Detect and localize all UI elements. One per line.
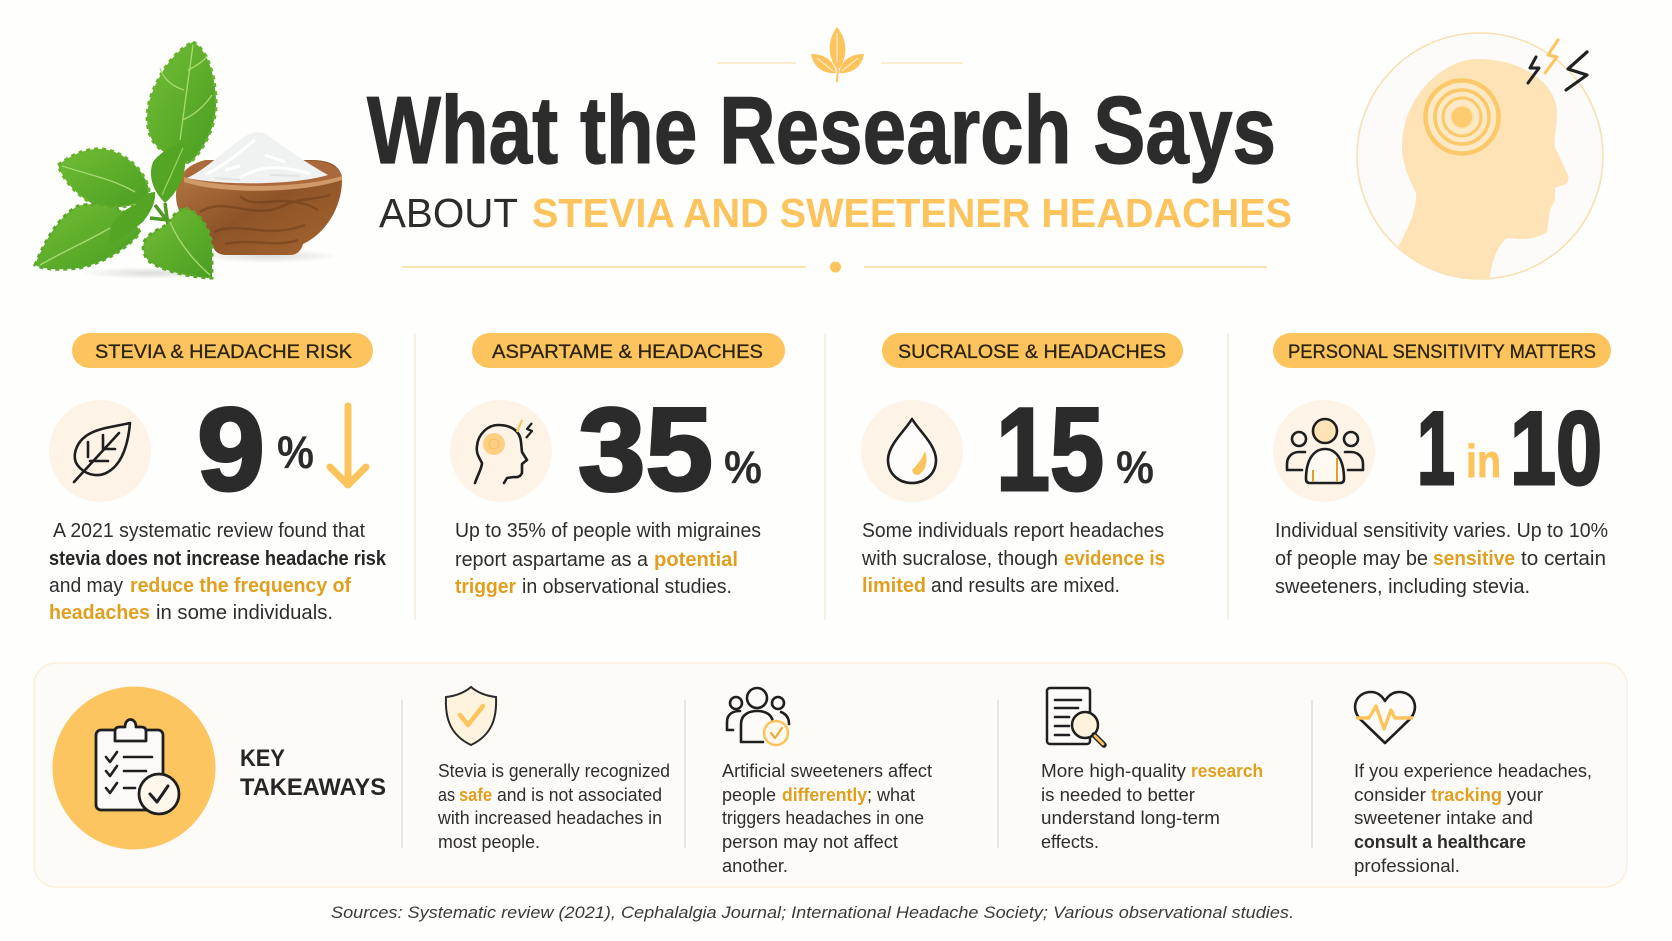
- icon: head with headache: [1357, 33, 1603, 279]
- stat: 1 in 10: 1: [1417, 391, 1455, 507]
- takeaway: tracking: [1354, 692, 1592, 876]
- takeaway: research: [1041, 688, 1263, 852]
- text: sensitivity finding: to certain: [1521, 548, 1606, 570]
- stat: 9 percent: 9: [197, 384, 265, 516]
- text: sensitivity finding: of people may be: [1275, 548, 1428, 570]
- text: aspartame finding: report aspartame as a: [455, 549, 649, 571]
- text: Stevia is generally recognized: [438, 761, 670, 781]
- text: professional.: [1354, 856, 1460, 876]
- text: stevia finding: headaches: [49, 602, 150, 624]
- text: sensitivity finding: [1275, 520, 1608, 598]
- text: research: [1191, 761, 1263, 781]
- text: most people.: [438, 832, 540, 852]
- text: Artificial sweeteners affect: [722, 761, 932, 781]
- text: aspartame finding: Up to 35% of people with migraines: [455, 520, 761, 542]
- photo: stevia leaves and bowl of powder: [35, 42, 342, 279]
- stat: 35 percent: %: [724, 441, 762, 493]
- text: as: [438, 785, 455, 805]
- text: stevia finding: in some individuals.: [156, 602, 333, 624]
- text: ; what: [867, 785, 915, 805]
- text: people: [722, 785, 776, 805]
- text: effects.: [1041, 832, 1099, 852]
- text: with increased headaches in: [437, 808, 662, 828]
- stat: 15 percent: %: [1116, 441, 1154, 493]
- text: your: [1507, 785, 1543, 805]
- panel: key takeaways: [34, 663, 1627, 887]
- text: another.: [722, 856, 788, 876]
- icon: people: [1273, 400, 1375, 502]
- text: aspartame finding: potential: [654, 549, 738, 571]
- icon: head with lightning: [450, 400, 552, 502]
- panel: stevia and headache risk: [49, 333, 387, 624]
- text: safe: [459, 785, 492, 805]
- text: [1041, 761, 1263, 852]
- text: aspartame finding: trigger: [455, 576, 516, 598]
- icon: heart with pulse: [1355, 692, 1415, 743]
- arrow: down: [330, 406, 366, 485]
- heading: key takeaways: [240, 745, 386, 801]
- text: tracking: [1431, 785, 1502, 805]
- text: sweetener intake and: [1354, 808, 1533, 828]
- stat: 15 percent: 15: [996, 384, 1104, 516]
- icon: drop: [861, 400, 963, 502]
- text: stevia finding: and may: [49, 575, 123, 597]
- icon: clipboard badge: [52, 686, 216, 850]
- text: stevia finding: reduce the frequency of: [130, 575, 351, 597]
- stat: 1 in 10: 10: [1510, 391, 1602, 507]
- title underline with dot: [402, 262, 1267, 272]
- heading: key takeaways: KEY: [240, 745, 285, 772]
- text: consult a healthcare: [1354, 832, 1526, 852]
- text: consider: [1354, 785, 1426, 805]
- text: [722, 761, 932, 876]
- text: If you experience headaches,: [1354, 761, 1592, 781]
- text: [1354, 761, 1592, 876]
- panel: aspartame and headaches: [450, 333, 785, 598]
- text: stevia finding: [49, 520, 387, 624]
- text: More high-quality: [1041, 761, 1186, 781]
- text: stevia finding: A 2021 systematic review found that: [53, 520, 365, 542]
- heading pill: stevia: STEVIA & HEADACHE RISK: [95, 342, 352, 363]
- column dividers: [415, 333, 1228, 620]
- text: stevia finding: stevia does not increase headache risk: [49, 548, 387, 570]
- text: aspartame finding: in observational studies.: [522, 576, 732, 598]
- icon: document with magnifier: [1047, 688, 1104, 745]
- panel: personal sensitivity matters: [1273, 333, 1611, 598]
- text: differently: [782, 785, 867, 805]
- text: sensitivity finding: sensitive: [1433, 548, 1515, 570]
- text: aspartame finding: [455, 520, 761, 598]
- icon: leaf: [49, 400, 151, 502]
- heading pill: sucralose: SUCRALOSE & HEADACHES: [898, 342, 1166, 363]
- text: sensitivity finding: sweeteners, including stevia.: [1275, 576, 1530, 598]
- icon: shield: [446, 687, 496, 745]
- title: What the Research Says: [367, 77, 1276, 184]
- heading pill: sensitivity: [1273, 333, 1611, 368]
- text: sensitivity finding: Individual sensitivity varies. Up to 10%: [1275, 520, 1608, 542]
- icon: people with check: [727, 688, 789, 745]
- sources: Sources: Systematic review (2021), Cephalalgia Journal; International Headache Society; Various observational studies.: [331, 903, 1294, 922]
- text: understand long-term: [1041, 808, 1220, 828]
- heading pill: aspartame: [472, 333, 785, 368]
- text: sucralose finding: [861, 520, 1165, 597]
- text: and is not associated: [497, 785, 662, 805]
- takeaway: differently: [722, 688, 932, 876]
- text: [437, 761, 670, 852]
- text: sucralose finding: limited: [862, 575, 926, 597]
- heading: key takeaways: TAKEAWAYS: [240, 774, 386, 801]
- subtitle: STEVIA AND SWEETENER HEADACHES: [532, 190, 1292, 236]
- stat: 1 in 10: in: [1466, 435, 1501, 487]
- stat: 9 percent: %: [277, 426, 314, 478]
- text: sucralose finding: with sucralose, though: [861, 548, 1058, 570]
- panel: sucralose and headaches: [861, 333, 1183, 597]
- text: sucralose finding: and results are mixed.: [931, 575, 1120, 597]
- heading pill: sensitivity: PERSONAL SENSITIVITY MATTERS: [1288, 342, 1596, 363]
- stat: 9 percent: [197, 384, 314, 516]
- stat: 35 percent: 35: [578, 384, 713, 516]
- text: is needed to better: [1041, 785, 1195, 805]
- text: sucralose finding: Some individuals report headaches: [862, 520, 1164, 542]
- heading pill: stevia: [72, 333, 373, 368]
- subtitle: ABOUT: [379, 190, 518, 236]
- takeaway: safe: [437, 687, 670, 852]
- icon: wheat sprig ornament: [717, 27, 963, 82]
- heading pill: aspartame: ASPARTAME & HEADACHES: [492, 342, 763, 363]
- text: person may not affect: [722, 832, 898, 852]
- heading pill: sucralose: [882, 333, 1183, 368]
- stat: 1 in 10: [1417, 391, 1602, 507]
- text: triggers headaches in one: [722, 808, 924, 828]
- text: sucralose finding: evidence is: [1064, 548, 1165, 570]
